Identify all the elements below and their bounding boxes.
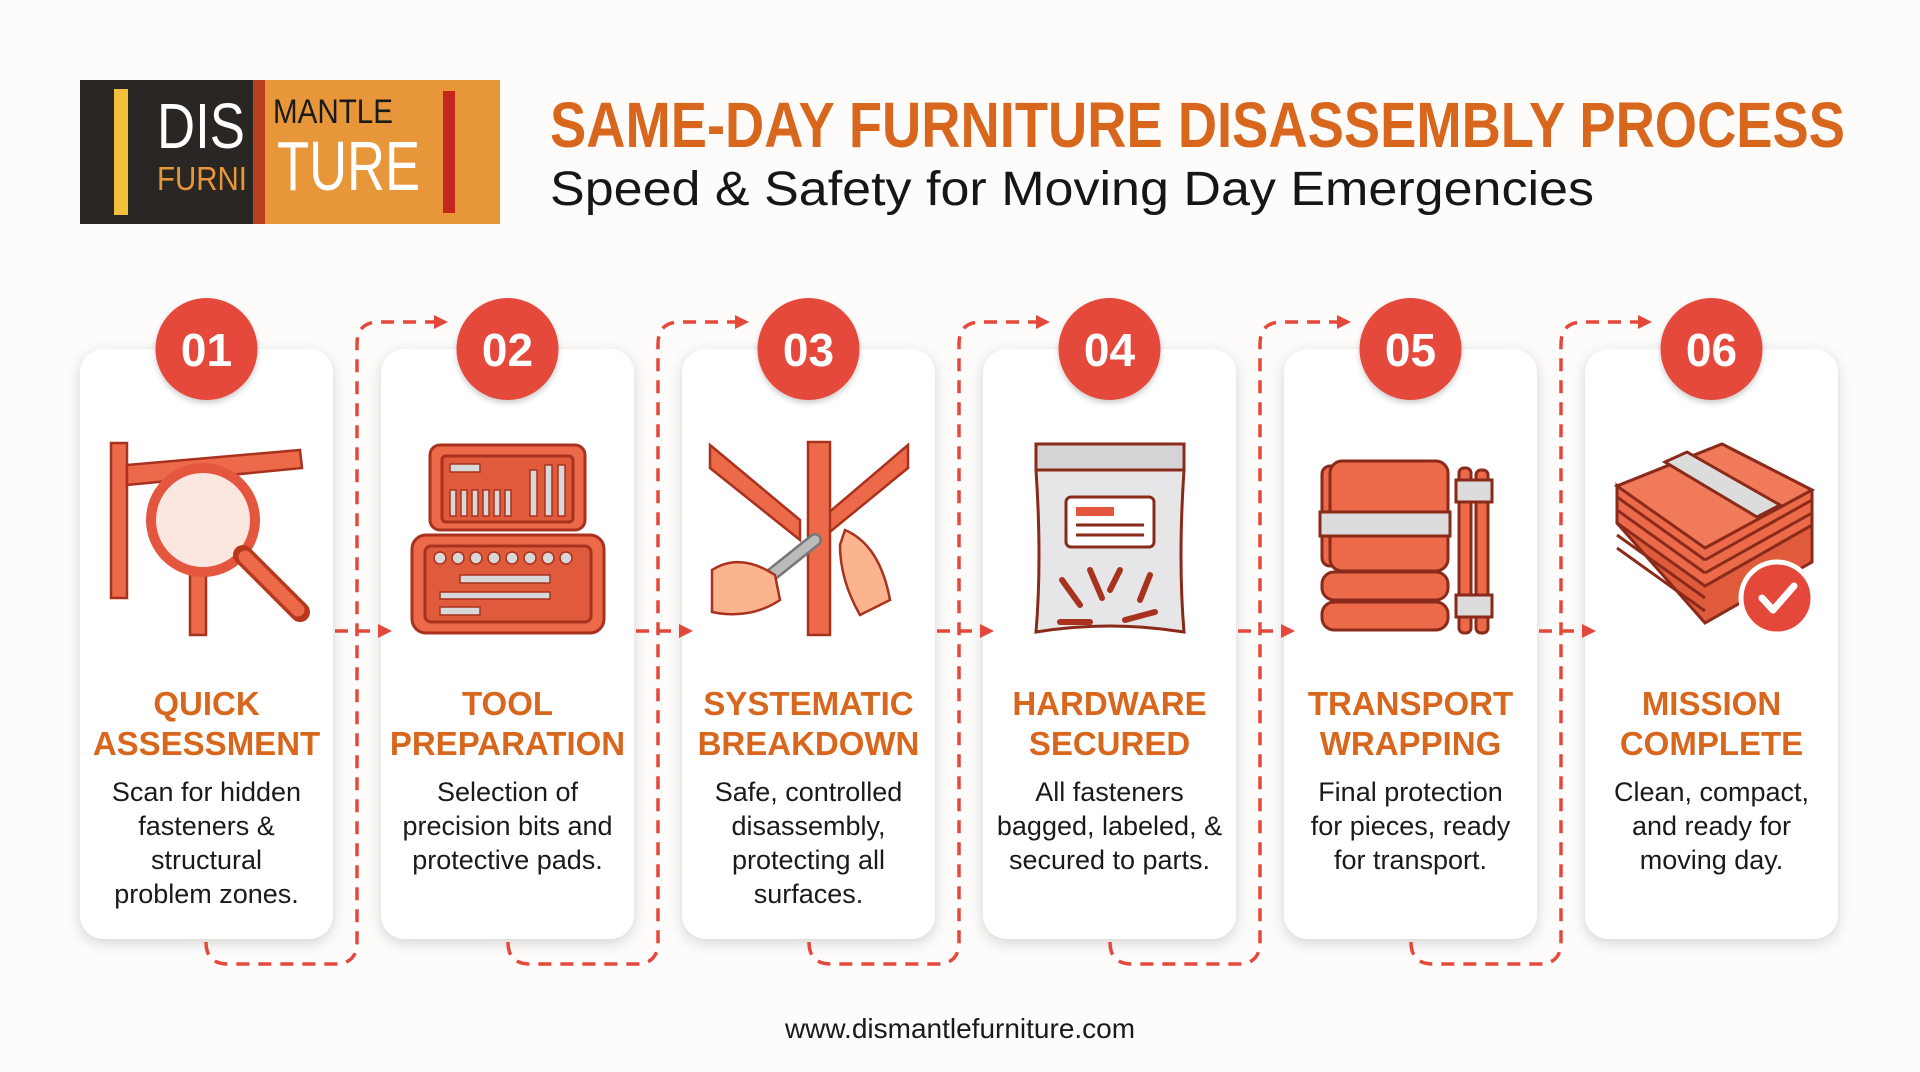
panel: step 2 xyxy=(381,298,634,939)
heading: HARDWARE xyxy=(1012,685,1207,722)
logo: DIS xyxy=(157,90,245,162)
description: for transport. xyxy=(1334,845,1487,875)
badge 02 xyxy=(456,298,558,400)
badge 04: 04 xyxy=(1084,324,1135,376)
heading: TRANSPORT xyxy=(1308,685,1513,722)
heading: MISSION xyxy=(1642,685,1781,722)
description: protecting all xyxy=(732,845,885,875)
panel: step 5 xyxy=(1284,298,1537,939)
description: structural xyxy=(151,845,262,875)
icon: hardware bag xyxy=(1036,444,1184,632)
panel: step 1 xyxy=(80,298,333,939)
panel: step 3 xyxy=(682,298,935,939)
description: surfaces. xyxy=(754,879,863,909)
logo: TURE xyxy=(277,127,420,205)
description: precision bits and xyxy=(402,811,613,841)
description: fasteners & xyxy=(138,811,275,841)
heading: SYSTEMATIC xyxy=(703,685,914,722)
icon: stacked boards with check xyxy=(1617,444,1813,634)
description: Final protection xyxy=(1318,777,1503,807)
logo: FURNI xyxy=(157,160,247,197)
badge 01: 01 xyxy=(181,324,232,376)
description: moving day. xyxy=(1640,845,1783,875)
badge 03: 03 xyxy=(783,324,834,376)
heading: COMPLETE xyxy=(1620,725,1803,762)
description: and ready for xyxy=(1632,811,1791,841)
logo xyxy=(80,80,500,224)
footer url: www.dismantlefurniture.com xyxy=(784,1013,1135,1044)
icon: magnifier over frame xyxy=(111,443,302,635)
icon: toolbox xyxy=(412,445,604,633)
description: disassembly, xyxy=(731,811,886,841)
heading: SECURED xyxy=(1029,725,1190,762)
description: for pieces, ready xyxy=(1311,811,1511,841)
description: Safe, controlled xyxy=(715,777,902,807)
badge 05: 05 xyxy=(1385,324,1436,376)
heading: BREAKDOWN xyxy=(698,725,919,762)
description: protective pads. xyxy=(412,845,603,875)
badge 06 xyxy=(1660,298,1762,400)
badge 03 xyxy=(758,298,860,400)
badge 01 xyxy=(156,298,258,400)
badge 04 xyxy=(1058,298,1160,400)
heading: ASSESSMENT xyxy=(93,725,320,762)
panel: step 6 xyxy=(1585,298,1838,939)
badge 02: 02 xyxy=(482,324,533,376)
description: Selection of xyxy=(437,777,579,807)
description: Clean, compact, xyxy=(1614,777,1809,807)
description: problem zones. xyxy=(114,879,299,909)
heading: PREPARATION xyxy=(390,725,625,762)
description: secured to parts. xyxy=(1009,845,1210,875)
subtitle: Speed & Safety for Moving Day Emergencies xyxy=(550,163,1594,216)
heading: WRAPPING xyxy=(1320,725,1501,762)
logo: MANTLE xyxy=(273,93,393,131)
badge 05 xyxy=(1360,298,1462,400)
panel: step 4 xyxy=(983,298,1236,939)
description: Scan for hidden xyxy=(112,777,301,807)
icon: wrapped pieces xyxy=(1320,461,1492,633)
icon: hands with wrench xyxy=(710,442,908,635)
heading: TOOL xyxy=(462,685,553,722)
heading: QUICK xyxy=(153,685,260,722)
description: All fasteners xyxy=(1035,777,1184,807)
description: bagged, labeled, & xyxy=(997,811,1222,841)
badge 06: 06 xyxy=(1686,324,1737,376)
connectors xyxy=(206,322,1640,964)
